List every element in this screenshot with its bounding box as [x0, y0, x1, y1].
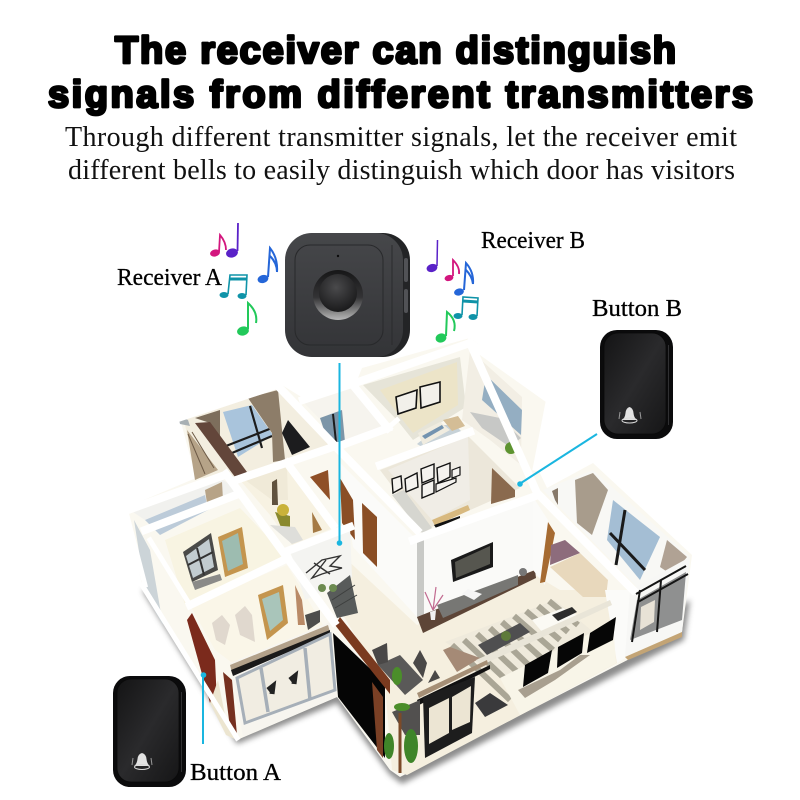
tall white wall left of hall	[340, 463, 417, 617]
music notes: right group	[426, 240, 478, 344]
connector line: receiver to house	[337, 363, 342, 546]
subtitle: different bells to easily distinguish which door has visitors	[68, 155, 735, 186]
title	[48, 30, 753, 116]
wall openings by living room	[533, 497, 608, 597]
front-left glazed window	[230, 622, 337, 737]
red door left	[187, 613, 237, 740]
room: back bathroom	[303, 387, 387, 443]
striped rug	[445, 600, 615, 700]
living furniture and white sofa	[443, 600, 616, 717]
TV wall	[417, 497, 536, 633]
dining area	[372, 643, 440, 773]
room: front-left with clothes	[190, 565, 323, 665]
illustration: isometric house floor plan	[125, 338, 692, 784]
right room with curtains and windows	[543, 470, 690, 587]
hall, living and dining floor	[340, 555, 617, 775]
room: left-middle with door	[165, 508, 285, 605]
connector line: button B to house	[517, 434, 597, 487]
right outer wall	[605, 557, 690, 663]
music notes: left group	[209, 223, 277, 337]
wall tops	[125, 343, 633, 738]
subtitle: Through different transmitter signals, let the receiver emit	[65, 122, 737, 153]
doors along hall	[340, 478, 377, 567]
device: button A	[113, 676, 186, 787]
room: back bedroom with frames	[363, 357, 466, 447]
device: receiver	[285, 233, 410, 357]
title: signals from different transmitters	[48, 74, 753, 116]
title: The receiver can distinguish	[115, 30, 676, 72]
wall art panel	[290, 527, 358, 618]
room: far-left	[130, 478, 238, 625]
black exterior wall	[333, 617, 390, 758]
black glazed door and rails	[417, 660, 490, 758]
connector line: button A to house	[201, 672, 206, 744]
room: back-left bedroom	[178, 388, 337, 480]
label: Button B: Button B	[592, 296, 682, 322]
subtitle	[65, 122, 737, 186]
room: picture wall room	[380, 436, 520, 533]
room: top-right balcony	[462, 350, 522, 465]
device: button B	[600, 330, 673, 439]
label: Button A: Button A	[190, 760, 282, 786]
room: middle-left with flowers	[240, 465, 333, 545]
label: Receiver A: Receiver A	[117, 265, 223, 291]
label: Receiver B: Receiver B	[481, 228, 585, 254]
